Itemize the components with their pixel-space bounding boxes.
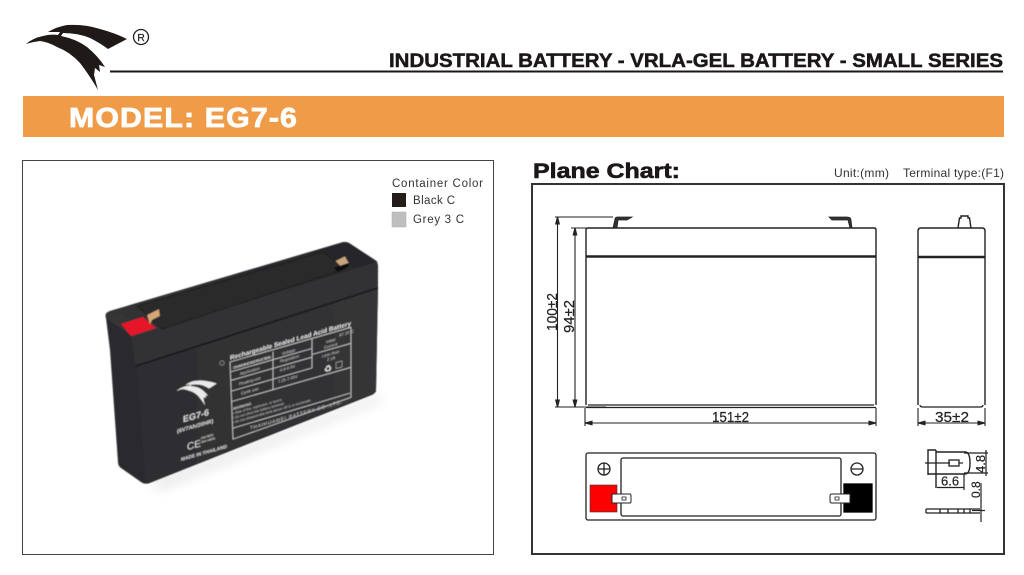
battery label: ♻	[324, 363, 332, 375]
right terminal	[829, 217, 852, 228]
battery label: WARNING	[233, 401, 251, 411]
battery label: Application	[240, 366, 260, 376]
panel: product photo	[22, 160, 494, 554]
positive terminal pad	[590, 485, 617, 512]
panel: plane chart: 94±2	[561, 300, 578, 333]
battery label: • Do not short the battery terminal.	[233, 401, 284, 420]
battery label: THAIHUAWEI BATTERY CO.,LTD.	[250, 399, 342, 432]
dimension: 100	[555, 217, 613, 407]
panel: plane chart: 35±2	[935, 409, 969, 426]
battery label: Current	[324, 341, 338, 350]
panel: plane chart: 6.6	[941, 474, 959, 488]
panel: plane chart: 0.8	[969, 481, 983, 498]
battery label: Less than	[322, 349, 339, 359]
battery label: 7.25-7.45V	[278, 374, 298, 384]
logo: brand wings	[26, 25, 148, 90]
battery label: 6.8-6.9V	[280, 363, 295, 373]
battery label: • Risk of fire, explosion, or burns.	[233, 397, 283, 416]
container colour legend	[392, 178, 483, 227]
battery label: 2.1A	[327, 355, 335, 362]
battery label: Voltage	[282, 347, 296, 356]
container colour legend: Container Color	[392, 178, 483, 190]
front view drawing	[555, 217, 876, 426]
terminal detail drawing	[925, 450, 988, 522]
battery label: Rechargeable Sealed Lead Acid Battery	[230, 320, 351, 362]
panel: plane chart: 151±2	[712, 409, 749, 426]
unit label: Unit:(mm)	[834, 166, 889, 180]
battery logo	[176, 378, 217, 410]
battery label	[230, 320, 354, 440]
panel: plane chart: 100±2	[544, 293, 561, 331]
battery model text: ISO 14001	[201, 436, 216, 444]
model banner: MODEL: EG7-6	[69, 103, 297, 134]
battery model text	[177, 402, 227, 464]
battery model text: MADE IN THAILAND	[181, 444, 227, 463]
battery label: Initial	[326, 337, 335, 344]
header title: INDUSTRIAL BATTERY - VRLA-GEL BATTERY - SMALL SERIES	[389, 50, 1003, 72]
battery label: Cycle use	[241, 386, 259, 396]
left terminal	[613, 217, 632, 228]
model banner	[23, 96, 1004, 137]
battery model text: (6V7Ah/20HR)	[177, 419, 213, 435]
battery model text: CE	[187, 438, 201, 453]
battery label: CHARGING INSTRUCTION	[233, 354, 271, 370]
dimension: 151	[585, 408, 876, 426]
plane chart heading: Plane Chart:	[533, 160, 680, 183]
battery photo	[106, 242, 384, 490]
battery model text: ISO 9001	[201, 433, 214, 440]
plus symbol	[598, 463, 610, 475]
container colour legend: Black C	[413, 195, 455, 207]
battery label: • Do not disassemble,heat above 40°C or incinerate.	[233, 398, 312, 425]
battery label: AT 25°C	[339, 329, 354, 338]
container colour legend: Grey 3 C	[413, 214, 464, 226]
battery model text: EG7-6	[183, 407, 209, 424]
minus symbol	[851, 463, 863, 475]
terminal type label: Terminal type:(F1)	[903, 166, 1004, 180]
battery label: Floating use	[239, 375, 261, 386]
panel: plane chart	[532, 184, 1004, 554]
negative terminal pad	[844, 484, 872, 512]
side view drawing	[918, 216, 985, 426]
battery label: Regulation	[280, 353, 299, 364]
panel: plane chart: 4.8	[973, 455, 988, 473]
top view drawing	[586, 453, 876, 520]
logo: brand wings: R	[137, 32, 145, 44]
